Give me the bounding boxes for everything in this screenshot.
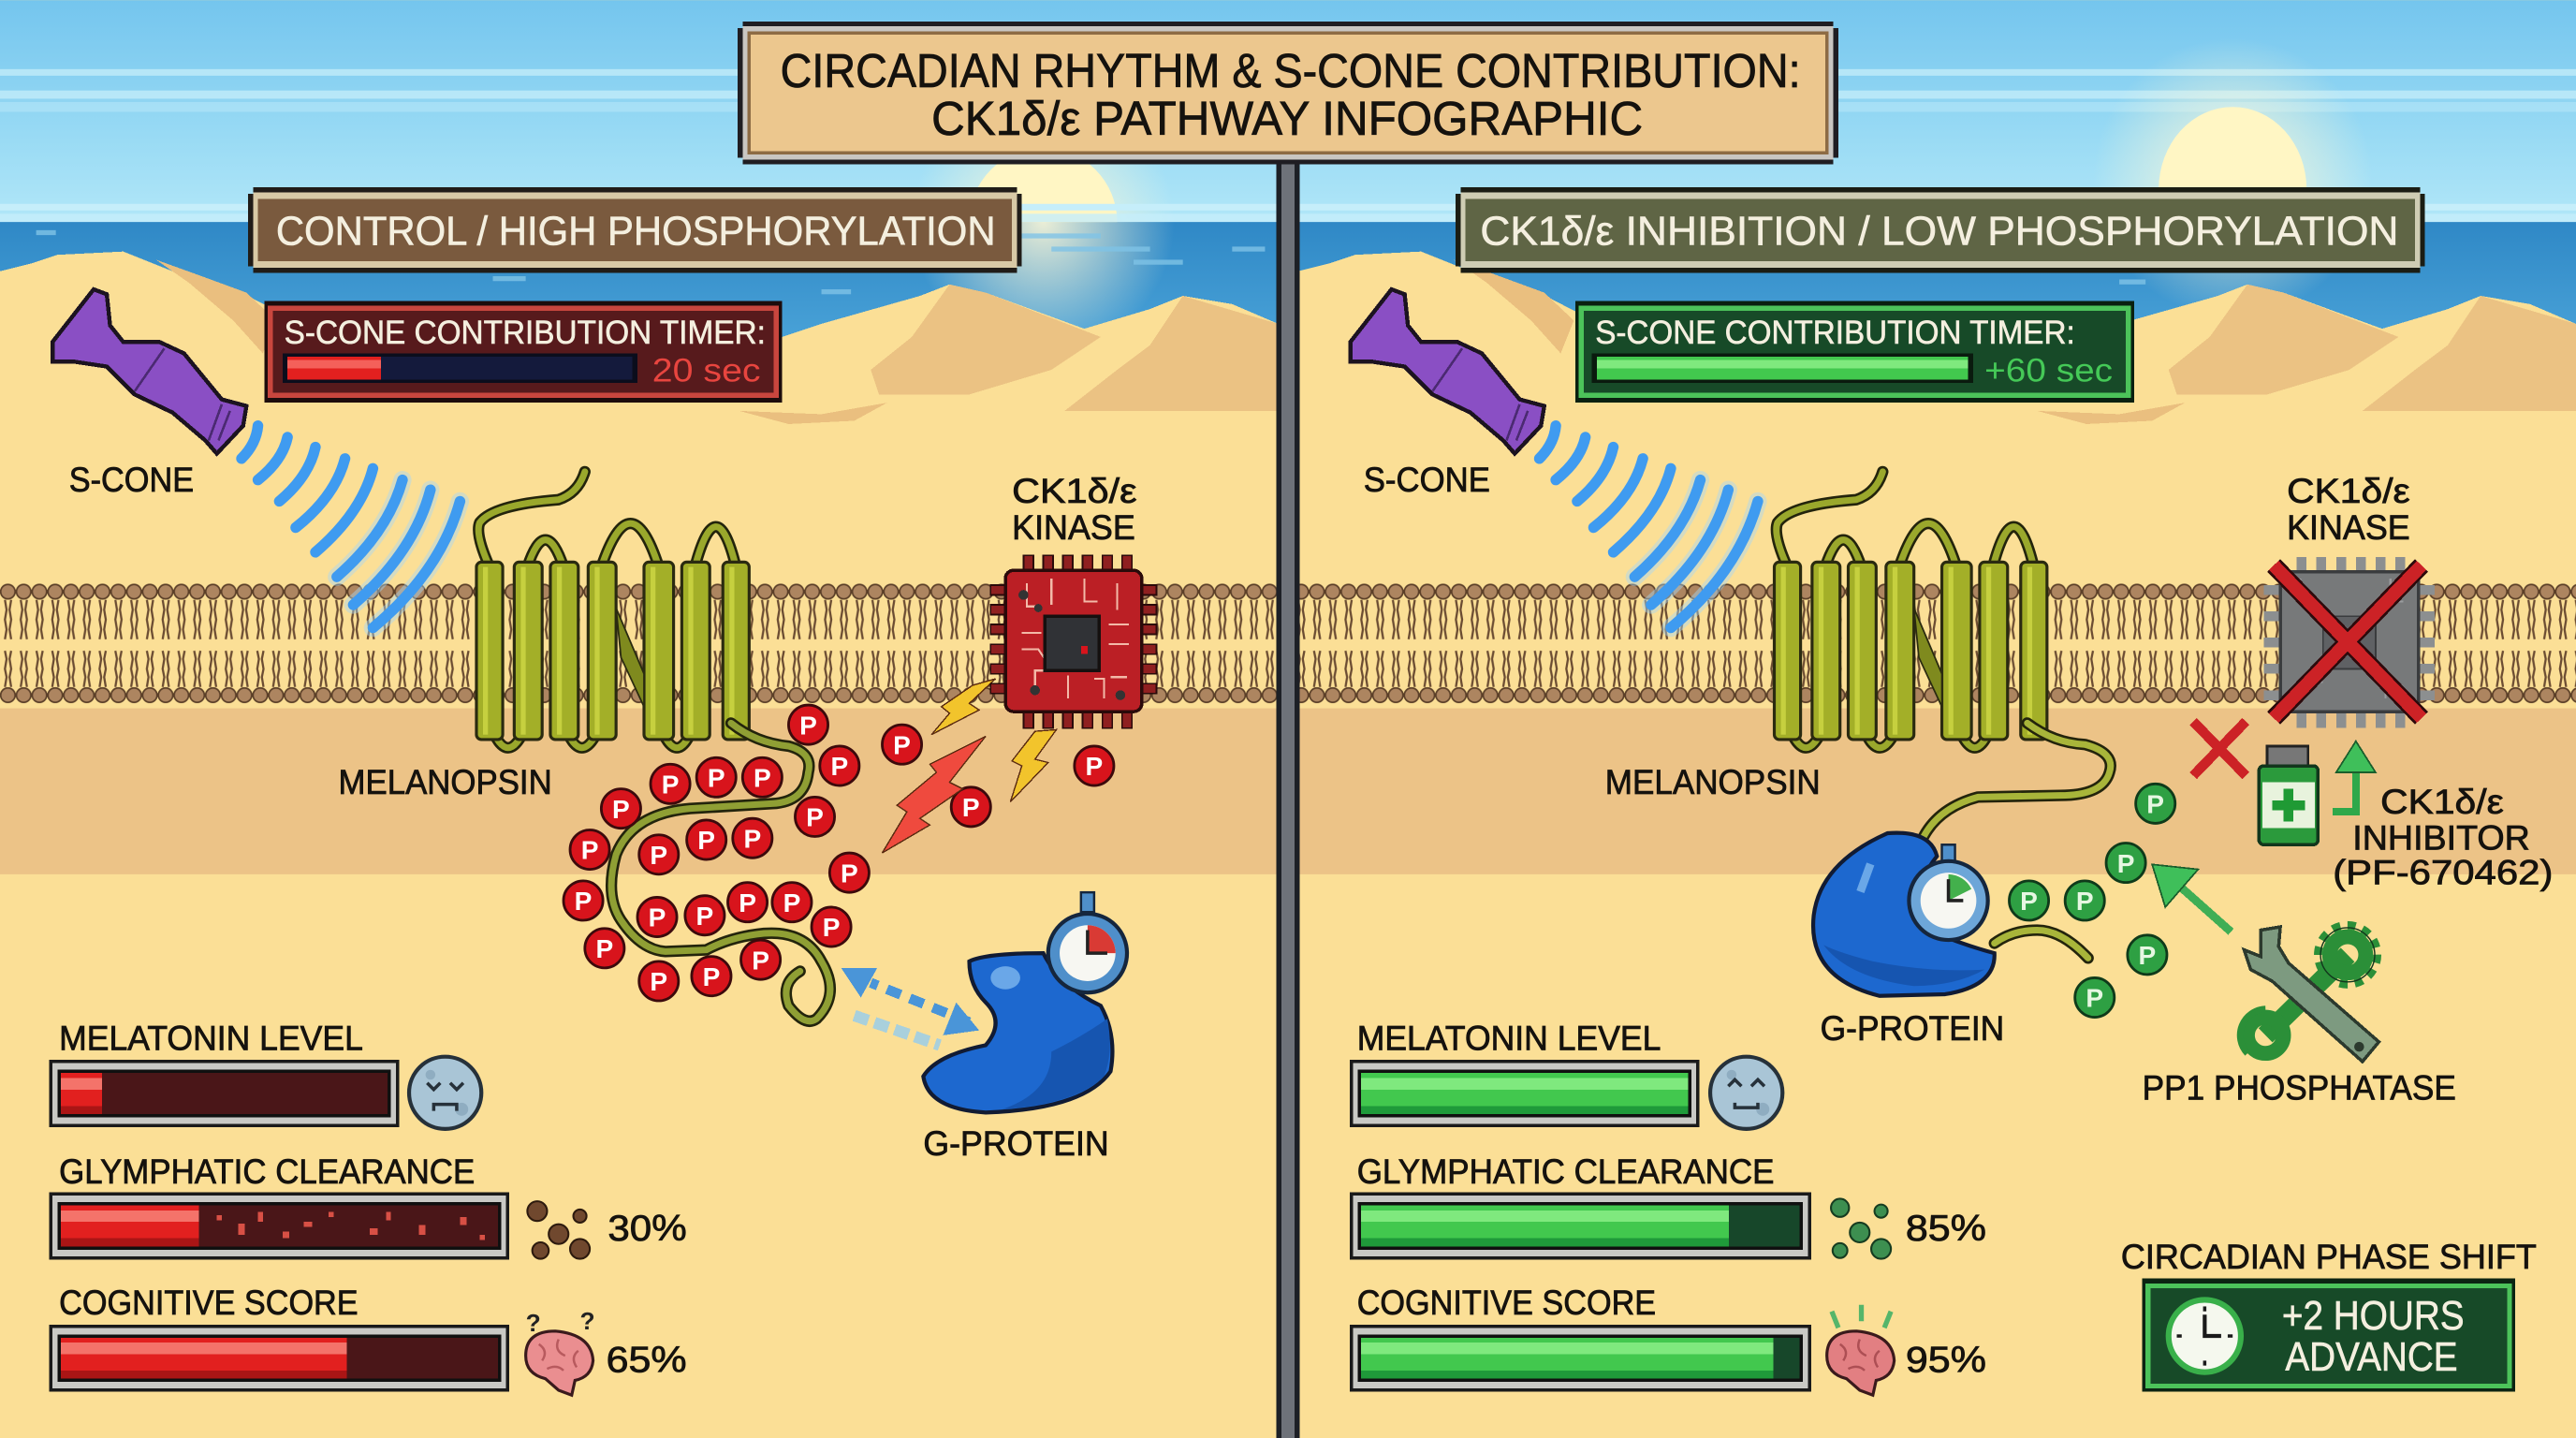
label: ck1 inhibitor: CK1δ/ε bbox=[2380, 783, 2504, 821]
phosphate groups bbox=[564, 705, 1114, 1001]
phosphate groups: P bbox=[739, 888, 756, 917]
metric: melatonin level: MELATONIN LEVEL bbox=[1357, 1020, 1661, 1058]
metric: melatonin level bbox=[1350, 1020, 1782, 1129]
label: s-cone: S-CONE bbox=[69, 461, 194, 499]
value: 65%: 65% bbox=[607, 1341, 687, 1381]
s-cone timer: +60 sec bbox=[1575, 301, 2134, 403]
metric: cognitive score: COGNITIVE SCORE bbox=[59, 1284, 359, 1322]
label: ck1 kinase bbox=[1012, 472, 1137, 547]
phosphate groups: P bbox=[650, 841, 667, 870]
released phosphates bbox=[2009, 784, 2175, 1018]
icon: blocked x bbox=[2193, 722, 2246, 776]
icon: confused brain: ? bbox=[580, 1307, 595, 1335]
icon: confused brain bbox=[526, 1307, 595, 1395]
phosphate groups: P bbox=[581, 836, 598, 865]
released phosphates: P bbox=[2086, 984, 2103, 1013]
tail end bbox=[1995, 931, 2088, 958]
phosphate groups: P bbox=[823, 913, 840, 942]
light waves bbox=[242, 426, 460, 628]
label: ck1 inhibitor: INHIBITOR bbox=[2352, 819, 2530, 858]
panel: control / high phosphorylation bbox=[50, 187, 1157, 1395]
phosphate groups: P bbox=[703, 962, 720, 991]
arrow: inhibitor to kinase bbox=[2333, 741, 2376, 812]
title text: CK1δ/ε PATHWAY INFOGRAPHIC bbox=[931, 92, 1643, 145]
heading: control bbox=[248, 187, 1022, 272]
phosphate groups: P bbox=[841, 858, 858, 888]
metric: glymphatic clearance bbox=[1350, 1152, 1986, 1259]
value: 85%: 85% bbox=[1906, 1209, 1986, 1249]
icon: clock bbox=[2169, 1299, 2241, 1372]
title text: CIRCADIAN RHYTHM & S-CONE CONTRIBUTION: bbox=[781, 44, 1801, 97]
phosphate groups: P bbox=[893, 730, 911, 759]
icon: stopwatch, short timer bbox=[1048, 892, 1127, 992]
phosphate groups: P bbox=[596, 934, 613, 963]
panel: ck1 inhibition / low phosphorylation bbox=[1350, 187, 2553, 1395]
s-cone timer: 20 sec: S-CONE CONTRIBUTION TIMER: bbox=[285, 315, 766, 351]
metric: cognitive score bbox=[50, 1284, 687, 1395]
metric: cognitive score: COGNITIVE SCORE bbox=[1357, 1284, 1656, 1322]
light waves bbox=[1540, 426, 1758, 628]
metric: melatonin level: MELATONIN LEVEL bbox=[59, 1020, 363, 1058]
heading: control: CONTROL / HIGH PHOSPHORYLATION bbox=[276, 209, 996, 255]
phosphate groups: P bbox=[697, 826, 715, 855]
heading: inhibition bbox=[1456, 187, 2425, 272]
released phosphates: P bbox=[2117, 849, 2134, 878]
released phosphates: P bbox=[2076, 887, 2094, 916]
melanopsin receptor bbox=[476, 472, 749, 748]
label: inhibited kinase: CK1δ/ε bbox=[2287, 472, 2410, 510]
vertical divider bbox=[1277, 161, 1299, 1438]
s-cone timer: +60 sec: S-CONE CONTRIBUTION TIMER: bbox=[1595, 315, 2075, 351]
phosphate groups: P bbox=[649, 903, 666, 932]
icon: sad moon bbox=[409, 1057, 481, 1129]
arrow: phosphatase action bbox=[2152, 864, 2231, 932]
label: ck1 inhibitor bbox=[2333, 783, 2553, 891]
metric: cognitive score bbox=[1350, 1284, 1986, 1395]
label: inhibited kinase bbox=[2287, 472, 2410, 547]
g-protein bbox=[923, 953, 1112, 1112]
icon: s-cone bbox=[52, 289, 246, 454]
phosphate groups: P bbox=[799, 711, 817, 740]
g-protein bbox=[1813, 833, 1995, 996]
phosphate groups: P bbox=[743, 824, 761, 853]
phosphate groups: P bbox=[962, 793, 980, 822]
phosphate groups: P bbox=[830, 752, 848, 781]
label: inhibited kinase: KINASE bbox=[2287, 508, 2410, 547]
phosphate groups: P bbox=[708, 763, 725, 792]
label: melanopsin: MELANOPSIN bbox=[1605, 763, 1821, 801]
s-cone timer: +60 sec: +60 sec bbox=[1984, 352, 2113, 389]
icon: cleared clumps bbox=[1831, 1198, 1891, 1259]
icon: pp1 phosphatase wrench and gears bbox=[2240, 925, 2378, 1062]
icon: inhibitor vial bbox=[2259, 746, 2318, 844]
label: g-protein: G-PROTEIN bbox=[1821, 1009, 2004, 1048]
phosphate groups: P bbox=[752, 946, 769, 975]
value: 30%: 30% bbox=[607, 1209, 687, 1249]
metric: melatonin level bbox=[50, 1020, 481, 1129]
icon: s-cone bbox=[1351, 289, 1544, 454]
phosphate groups: P bbox=[754, 763, 771, 792]
title plaque bbox=[738, 22, 1838, 165]
phosphate groups: P bbox=[612, 795, 630, 824]
phosphate groups: P bbox=[662, 770, 679, 800]
phosphorylated tail bbox=[611, 723, 830, 1021]
kinase lightning bolts bbox=[882, 679, 1057, 853]
s-cone timer: 20 sec bbox=[265, 301, 782, 403]
label: pp1 phosphatase: PP1 PHOSPHATASE bbox=[2143, 1068, 2456, 1107]
phosphate groups: P bbox=[806, 803, 824, 832]
icon: healthy brain bbox=[1827, 1305, 1895, 1395]
label: ck1 inhibitor: (PF-670462) bbox=[2333, 853, 2553, 891]
heading: inhibition: CK1δ/ε INHIBITION / LOW PHOSPHORYLATION bbox=[1480, 209, 2398, 255]
text: +2 hours advance: ADVANCE bbox=[2285, 1334, 2458, 1380]
released phosphates: P bbox=[2020, 887, 2038, 916]
melanopsin receptor bbox=[1775, 472, 2047, 748]
label: ck1 kinase: CK1δ/ε bbox=[1012, 472, 1137, 510]
phosphate groups: P bbox=[575, 887, 592, 916]
value: 95%: 95% bbox=[1906, 1341, 1986, 1381]
released phosphates: P bbox=[2146, 790, 2164, 819]
label: g-protein: G-PROTEIN bbox=[923, 1124, 1109, 1163]
dephosphorylated tail bbox=[1921, 723, 2111, 844]
icon: active kinase chip bbox=[990, 555, 1157, 728]
icon: stopwatch, long timer bbox=[1909, 844, 1988, 940]
text: +2 hours advance: +2 HOURS bbox=[2282, 1293, 2465, 1339]
text: +2 hours advance bbox=[2282, 1293, 2465, 1380]
icon: confused brain: ? bbox=[526, 1309, 541, 1337]
phosphate groups: P bbox=[650, 967, 667, 996]
phosphate groups: P bbox=[1086, 752, 1103, 781]
metric: glymphatic clearance: GLYMPHATIC CLEARANCE bbox=[1357, 1152, 1775, 1191]
phosphate groups: P bbox=[696, 902, 713, 931]
phosphate groups: P bbox=[783, 888, 800, 917]
arrows: transient binding bbox=[842, 968, 979, 1045]
title text bbox=[781, 44, 1801, 145]
label: melanopsin: MELANOPSIN bbox=[339, 763, 552, 801]
icon: inhibited kinase chip bbox=[2264, 557, 2435, 728]
released phosphates: P bbox=[2139, 941, 2156, 970]
icon: happy moon bbox=[1710, 1057, 1782, 1129]
metric: glymphatic clearance bbox=[50, 1152, 687, 1259]
callout: circadian phase shift: CIRCADIAN PHASE SHIFT bbox=[2121, 1238, 2537, 1276]
metric: glymphatic clearance: GLYMPHATIC CLEARANCE bbox=[59, 1152, 475, 1191]
callout: circadian phase shift bbox=[2121, 1238, 2537, 1392]
s-cone timer: 20 sec: 20 sec bbox=[652, 352, 761, 389]
label: ck1 kinase: KINASE bbox=[1012, 508, 1135, 547]
icon: waste clumps bbox=[527, 1201, 590, 1259]
label: s-cone: S-CONE bbox=[1364, 461, 1490, 499]
